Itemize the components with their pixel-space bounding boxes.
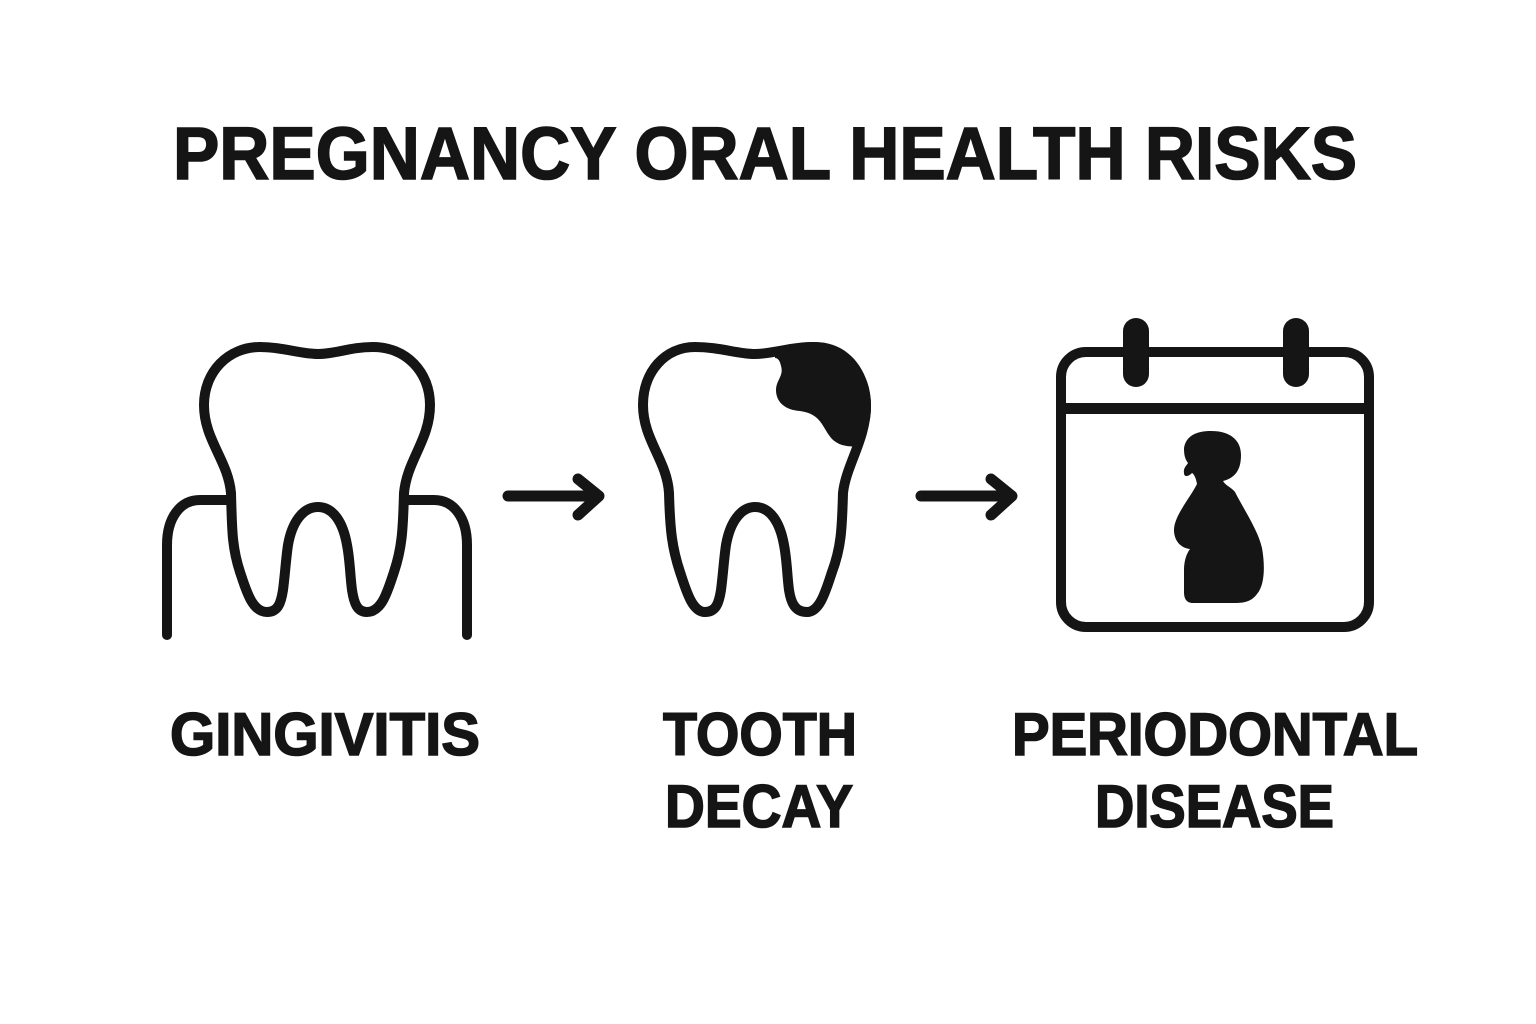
label: gingivitis: GINGIVITIS	[170, 701, 480, 768]
arrow: tooth decay to periodontal disease	[921, 479, 1012, 515]
calendar ring left	[1123, 318, 1149, 387]
label: periodontal disease	[1012, 701, 1418, 840]
label: periodontal disease: DISEASE	[1095, 773, 1334, 840]
label: tooth decay: TOOTH	[663, 701, 857, 768]
icon: decayed tooth	[643, 342, 871, 612]
label: tooth decay: DECAY	[665, 773, 853, 840]
icon: calendar with pregnant silhouette	[1061, 318, 1369, 627]
icon: healthy tooth with gums (gingivitis)	[167, 347, 467, 635]
title: PREGNANCY ORAL HEALTH RISKS	[173, 112, 1357, 195]
label: tooth decay	[663, 701, 857, 840]
decay patch	[775, 342, 871, 446]
label: periodontal disease: PERIODONTAL	[1012, 701, 1418, 768]
arrow: gingivitis to tooth decay	[508, 479, 599, 515]
calendar ring right	[1283, 318, 1309, 387]
pregnant silhouette	[1174, 431, 1264, 603]
